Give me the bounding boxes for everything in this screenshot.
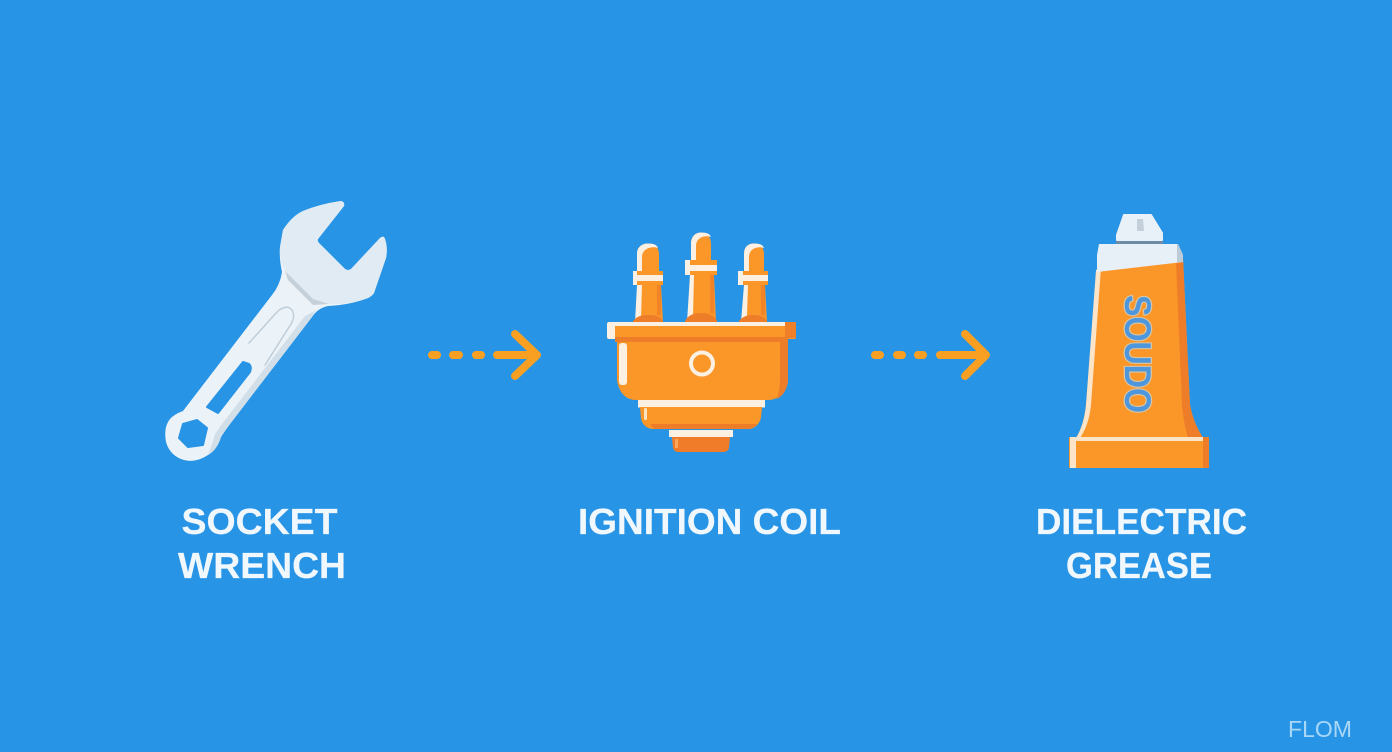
label: dielectric grease: DIELECTRIC <box>1036 501 1247 542</box>
coil lower body <box>640 407 762 429</box>
coil left pin <box>633 244 663 322</box>
tube left highlight <box>1076 268 1101 438</box>
label: socket wrench: SOCKET <box>182 501 338 542</box>
arrow: coil to grease <box>875 334 986 376</box>
tube base <box>1069 437 1209 468</box>
tube right shading <box>1176 258 1203 438</box>
label: socket wrench <box>178 501 346 586</box>
label: socket wrench: WRENCH <box>178 545 346 586</box>
coil flange <box>607 322 796 339</box>
tube cap shadow <box>1116 240 1163 244</box>
coil main body <box>617 337 788 400</box>
arrow: wrench to coil <box>432 334 537 376</box>
coil base <box>669 430 733 437</box>
wrench neck shadow <box>285 271 329 305</box>
label: ignition coil: IGNITION COIL <box>578 501 841 542</box>
tube collar <box>1097 244 1183 272</box>
tube cap <box>1117 215 1162 240</box>
icon: ignition coil <box>607 232 796 452</box>
wrench handle groove <box>249 307 294 365</box>
coil centre ring <box>691 352 713 374</box>
icon: socket wrench <box>165 201 387 461</box>
tube body <box>1076 258 1203 438</box>
wrench head tint <box>280 201 387 304</box>
coil body highlight <box>619 343 627 385</box>
wrench handle slot <box>207 362 251 413</box>
tube label: SOUDO <box>1117 295 1158 413</box>
wrench handle shading <box>208 310 317 455</box>
coil middle pin <box>685 232 717 322</box>
icon: dielectric grease tube <box>1069 215 1209 468</box>
label: dielectric grease: GREASE <box>1066 545 1212 586</box>
coil right pin <box>738 244 768 322</box>
wrench ring hole <box>179 420 207 447</box>
wrench silhouette <box>165 201 387 461</box>
label: dielectric grease <box>1036 501 1247 586</box>
coil white band <box>638 400 765 408</box>
watermark: FLOM: FLOM <box>1288 716 1352 742</box>
